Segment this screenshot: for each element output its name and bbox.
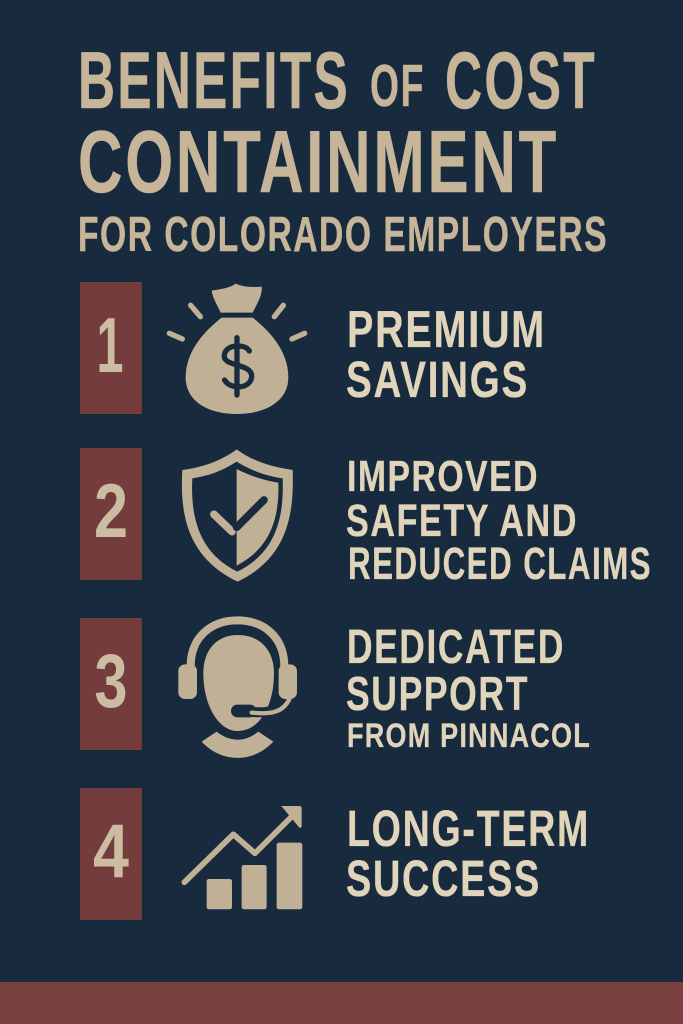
title: COST — [445, 36, 597, 126]
number badge 3: 3 — [94, 639, 128, 724]
label: dedicated support from pinnacol: SUPPORT — [346, 668, 529, 721]
icon: money bag — [169, 284, 305, 414]
number badge 1 — [80, 282, 142, 414]
title — [78, 36, 597, 211]
label: premium savings: PREMIUM — [347, 301, 546, 359]
label: dedicated support from pinnacol: DEDICATED — [347, 621, 565, 674]
footer bar — [0, 982, 683, 1024]
number badge 2: 2 — [94, 469, 128, 554]
icon: growth chart — [184, 806, 302, 909]
label: improved safety and reduced claims: SAFETY AND — [346, 495, 578, 546]
label: long-term success: LONG-TERM — [347, 800, 590, 857]
title: BENEFITS — [78, 36, 350, 126]
label: dedicated support from pinnacol — [346, 621, 591, 755]
number badge 2 — [80, 448, 142, 580]
label: dedicated support from pinnacol: FROM PINNACOL — [347, 717, 591, 755]
label: premium savings: SAVINGS — [346, 351, 529, 408]
title: OF — [370, 53, 425, 119]
number badge 3 — [80, 618, 142, 750]
number badge 4 — [80, 788, 142, 920]
number badge 1: 1 — [96, 301, 124, 389]
number badge 4: 4 — [93, 809, 129, 894]
icon: shield with check — [182, 449, 293, 582]
label: premium savings — [346, 301, 546, 408]
label: improved safety and reduced claims: IMPROVED — [347, 452, 539, 501]
label: long-term success — [346, 800, 590, 907]
label: long-term success: SUCCESS — [346, 850, 541, 907]
icon: headset agent — [178, 620, 297, 758]
label: improved safety and reduced claims — [346, 452, 652, 589]
